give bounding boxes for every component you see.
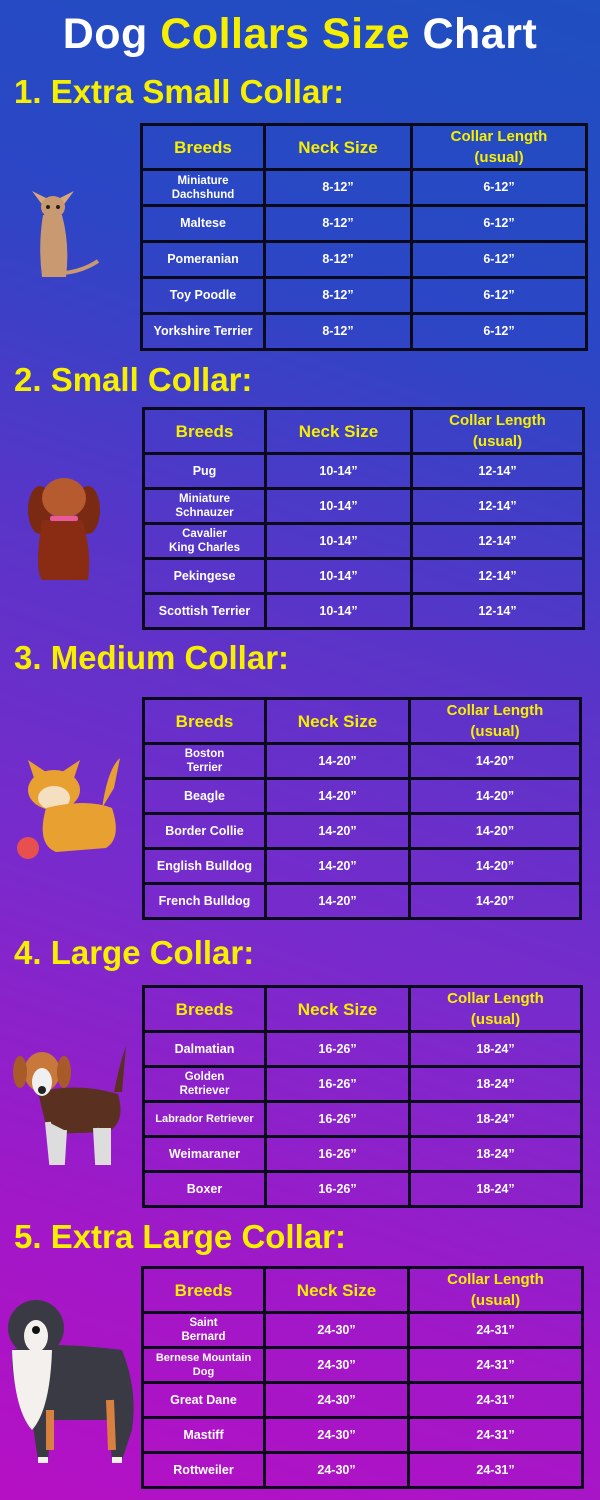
table: small: Collar Length bbox=[449, 412, 546, 429]
table: small: 10-14” bbox=[319, 498, 358, 512]
table: extra large: 24-31” bbox=[476, 1392, 515, 1406]
table: extra large: Saint bbox=[189, 1317, 218, 1329]
table: extra small: 6-12” bbox=[483, 324, 515, 338]
table: large: 16-26” bbox=[318, 1112, 357, 1126]
table: small: 10-14” bbox=[319, 568, 358, 582]
table: large: Neck Size bbox=[298, 1000, 377, 1018]
table: extra small: Toy Poodle bbox=[170, 288, 236, 302]
table: small: King Charles bbox=[169, 542, 240, 554]
heading: small: 2. Small Collar: bbox=[14, 361, 252, 398]
table: large: (usual) bbox=[471, 1011, 520, 1028]
heading: large: 4. Large Collar: bbox=[14, 934, 254, 971]
table: small: Miniature bbox=[179, 493, 230, 505]
table: extra small bbox=[140, 123, 588, 351]
table: small: Scottish Terrier bbox=[159, 604, 250, 618]
table: large: 18-24” bbox=[476, 1112, 515, 1126]
table: extra large: Dog bbox=[193, 1366, 214, 1378]
table: small: 12-14” bbox=[478, 604, 517, 618]
table: medium: Beagle bbox=[184, 788, 225, 802]
table: large: Collar Length bbox=[447, 990, 544, 1007]
table: extra small: 6-12” bbox=[483, 216, 515, 230]
table: large: 16-26” bbox=[318, 1076, 357, 1090]
table: small: Neck Size bbox=[299, 422, 378, 440]
table: medium: 14-20” bbox=[318, 754, 357, 768]
table: extra small: Yorkshire Terrier bbox=[154, 324, 252, 338]
table: extra large: 24-30” bbox=[317, 1392, 356, 1406]
table: small: 10-14” bbox=[319, 604, 358, 618]
table: medium: 14-20” bbox=[476, 754, 514, 768]
table: medium: 14-20” bbox=[476, 824, 514, 838]
table: large: Retriever bbox=[180, 1085, 229, 1097]
table: large: 16-26” bbox=[318, 1182, 357, 1196]
table: extra large: 24-31” bbox=[476, 1462, 515, 1476]
table: extra large: Breeds bbox=[175, 1280, 232, 1300]
table: large: Labrador Retriever bbox=[155, 1113, 254, 1125]
table: extra small: 8-12” bbox=[322, 252, 354, 266]
table: large bbox=[142, 985, 583, 1208]
title: Dog Collars Size Chart bbox=[63, 10, 537, 58]
table: extra small: Maltese bbox=[180, 216, 226, 230]
table: medium: 14-20” bbox=[476, 858, 514, 872]
table: extra large: Rottweiler bbox=[173, 1462, 234, 1476]
table: medium bbox=[142, 697, 582, 920]
table: small: 12-14” bbox=[478, 498, 517, 512]
table: extra large: Bernese Mountain bbox=[156, 1352, 251, 1364]
table: extra large: Great Dane bbox=[170, 1392, 237, 1406]
table: medium: Breeds bbox=[176, 712, 233, 730]
table: extra small: 6-12” bbox=[483, 180, 515, 194]
table: extra small: 6-12” bbox=[483, 252, 515, 266]
table: extra small: Pomeranian bbox=[167, 252, 239, 266]
table: small: Pug bbox=[193, 464, 216, 478]
icon: chihuahua bbox=[32, 191, 99, 277]
icon: beagle bbox=[13, 1046, 126, 1165]
table: extra large: 24-30” bbox=[317, 1358, 356, 1372]
table: extra large: Mastiff bbox=[183, 1428, 224, 1442]
table: large: 16-26” bbox=[318, 1042, 357, 1056]
table: small bbox=[142, 407, 585, 630]
table: extra large: 24-31” bbox=[476, 1428, 515, 1442]
table: medium: Boston bbox=[185, 748, 224, 760]
table: extra small: Breeds bbox=[174, 138, 232, 156]
table: medium: 14-20” bbox=[318, 824, 357, 838]
table: extra large: 24-30” bbox=[317, 1322, 356, 1336]
table: small: 12-14” bbox=[478, 568, 517, 582]
table: medium: 14-20” bbox=[476, 894, 514, 908]
table: small: Breeds bbox=[176, 422, 233, 440]
table: medium: (usual) bbox=[470, 723, 520, 740]
table: small: 12-14” bbox=[478, 464, 517, 478]
table: small: 10-14” bbox=[319, 464, 358, 478]
heading: extra large: 5. Extra Large Collar: bbox=[14, 1218, 346, 1255]
table: extra small: Collar Length bbox=[451, 128, 547, 145]
table: extra large: 24-30” bbox=[317, 1462, 356, 1476]
table: extra large: Bernard bbox=[181, 1331, 226, 1343]
heading: extra small: 1. Extra Small Collar: bbox=[14, 73, 344, 110]
table: medium: Collar Length bbox=[447, 702, 543, 719]
table: medium: English Bulldog bbox=[157, 858, 252, 872]
icon: corgi bbox=[17, 758, 120, 859]
table: extra small: 8-12” bbox=[322, 288, 354, 302]
table: extra large: 24-31” bbox=[476, 1322, 515, 1336]
table: small: 10-14” bbox=[319, 534, 358, 548]
table: large: 18-24” bbox=[476, 1182, 515, 1196]
table: medium: 14-20” bbox=[476, 788, 514, 802]
table: medium: 14-20” bbox=[318, 894, 357, 908]
table: extra large: 24-31” bbox=[476, 1358, 515, 1372]
table: large: 18-24” bbox=[476, 1076, 515, 1090]
table: large: 16-26” bbox=[318, 1146, 357, 1160]
table: large: Boxer bbox=[187, 1182, 222, 1196]
table: extra large: Neck Size bbox=[297, 1280, 376, 1300]
table: extra large: Collar Length bbox=[447, 1271, 544, 1288]
table: small: 12-14” bbox=[478, 534, 517, 548]
table: extra small: 8-12” bbox=[322, 324, 354, 338]
icon: bernese bbox=[8, 1300, 134, 1463]
table: extra small: 8-12” bbox=[322, 216, 354, 230]
table: small: Schnauzer bbox=[175, 507, 234, 519]
table: extra large: 24-30” bbox=[317, 1428, 356, 1442]
table: medium: 14-20” bbox=[318, 858, 357, 872]
table: extra small: Miniature bbox=[177, 174, 229, 186]
table: extra large bbox=[141, 1266, 584, 1489]
table: large: Breeds bbox=[176, 1000, 233, 1018]
table: extra small: Dachshund bbox=[172, 188, 234, 200]
table: medium: Terrier bbox=[187, 762, 222, 774]
table: large: 18-24” bbox=[476, 1146, 515, 1160]
table: medium: French Bulldog bbox=[159, 894, 250, 908]
table: extra small: 6-12” bbox=[483, 288, 515, 302]
icon: cavalier bbox=[28, 478, 100, 580]
table: large: 18-24” bbox=[476, 1042, 515, 1056]
table: extra small: (usual) bbox=[474, 149, 524, 166]
table: large: Weimaraner bbox=[169, 1146, 240, 1160]
table: large: Golden bbox=[185, 1071, 224, 1083]
table: medium: Border Collie bbox=[165, 824, 244, 838]
table: extra large: (usual) bbox=[471, 1292, 520, 1309]
table: extra small: Neck Size bbox=[298, 138, 378, 156]
table: extra small: 8-12” bbox=[322, 180, 354, 194]
table: medium: Neck Size bbox=[298, 712, 377, 730]
table: medium: 14-20” bbox=[318, 788, 357, 802]
table: small: Cavalier bbox=[182, 528, 227, 540]
table: large: Dalmatian bbox=[175, 1042, 234, 1056]
table: small: (usual) bbox=[473, 433, 522, 450]
table: small: Pekingese bbox=[174, 568, 235, 582]
heading: medium: 3. Medium Collar: bbox=[14, 639, 289, 676]
